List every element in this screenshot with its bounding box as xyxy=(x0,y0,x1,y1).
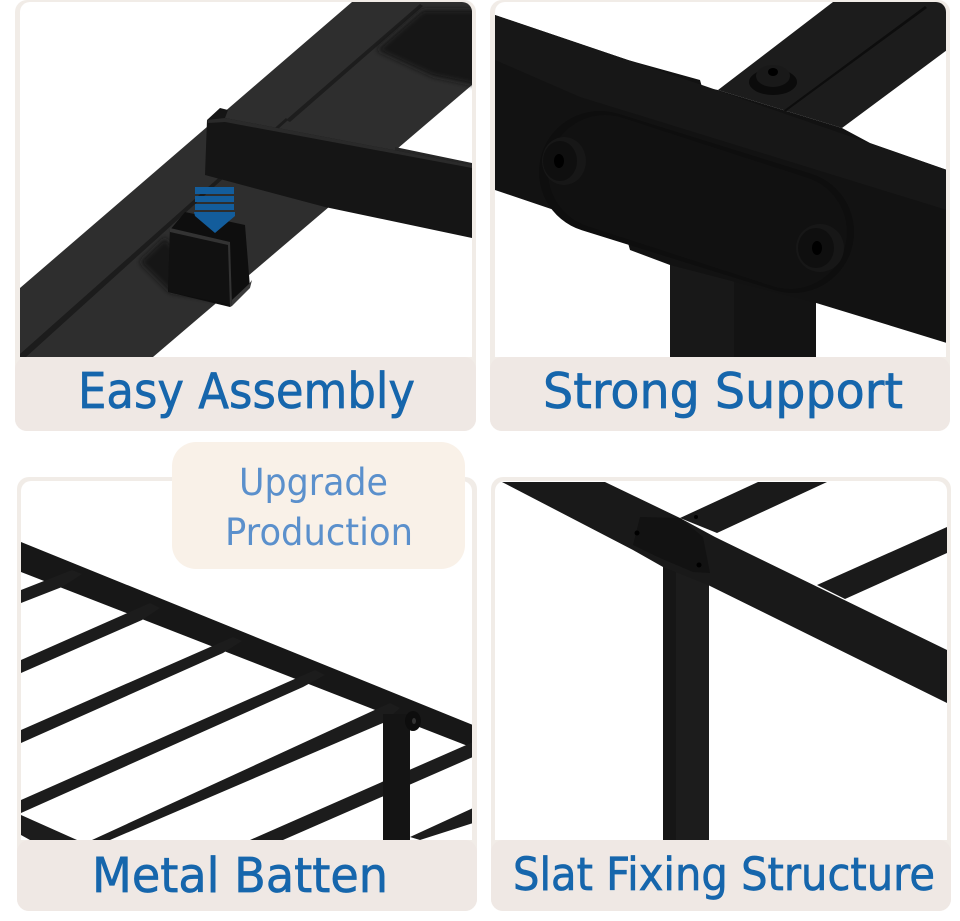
illustration: slat fixing joint xyxy=(502,482,947,842)
label: strong support: Strong Support xyxy=(543,363,903,420)
panel: strong support xyxy=(490,0,950,431)
badge: upgrade production xyxy=(172,442,465,569)
panel: easy assembly xyxy=(15,0,480,431)
icon: left bolt xyxy=(542,137,586,185)
icon: right bolt xyxy=(796,224,844,272)
illustration: metal slats xyxy=(21,542,473,842)
label: slat fixing structure: Slat Fixing Structure xyxy=(513,848,935,901)
illustration: bolted joint plate xyxy=(495,2,947,357)
icon: blue down arrow xyxy=(194,187,235,233)
illustration: slat slotting into bracket xyxy=(20,2,480,357)
panel: metal batten xyxy=(17,477,477,911)
badge text: upgrade: Upgrade xyxy=(239,461,388,504)
label: metal batten: Metal Batten xyxy=(92,848,388,904)
icon: top bolt xyxy=(749,65,797,95)
panel: slat fixing structure xyxy=(491,477,951,911)
label: easy assembly: Easy Assembly xyxy=(78,363,415,420)
badge text: production: Production xyxy=(225,511,413,554)
